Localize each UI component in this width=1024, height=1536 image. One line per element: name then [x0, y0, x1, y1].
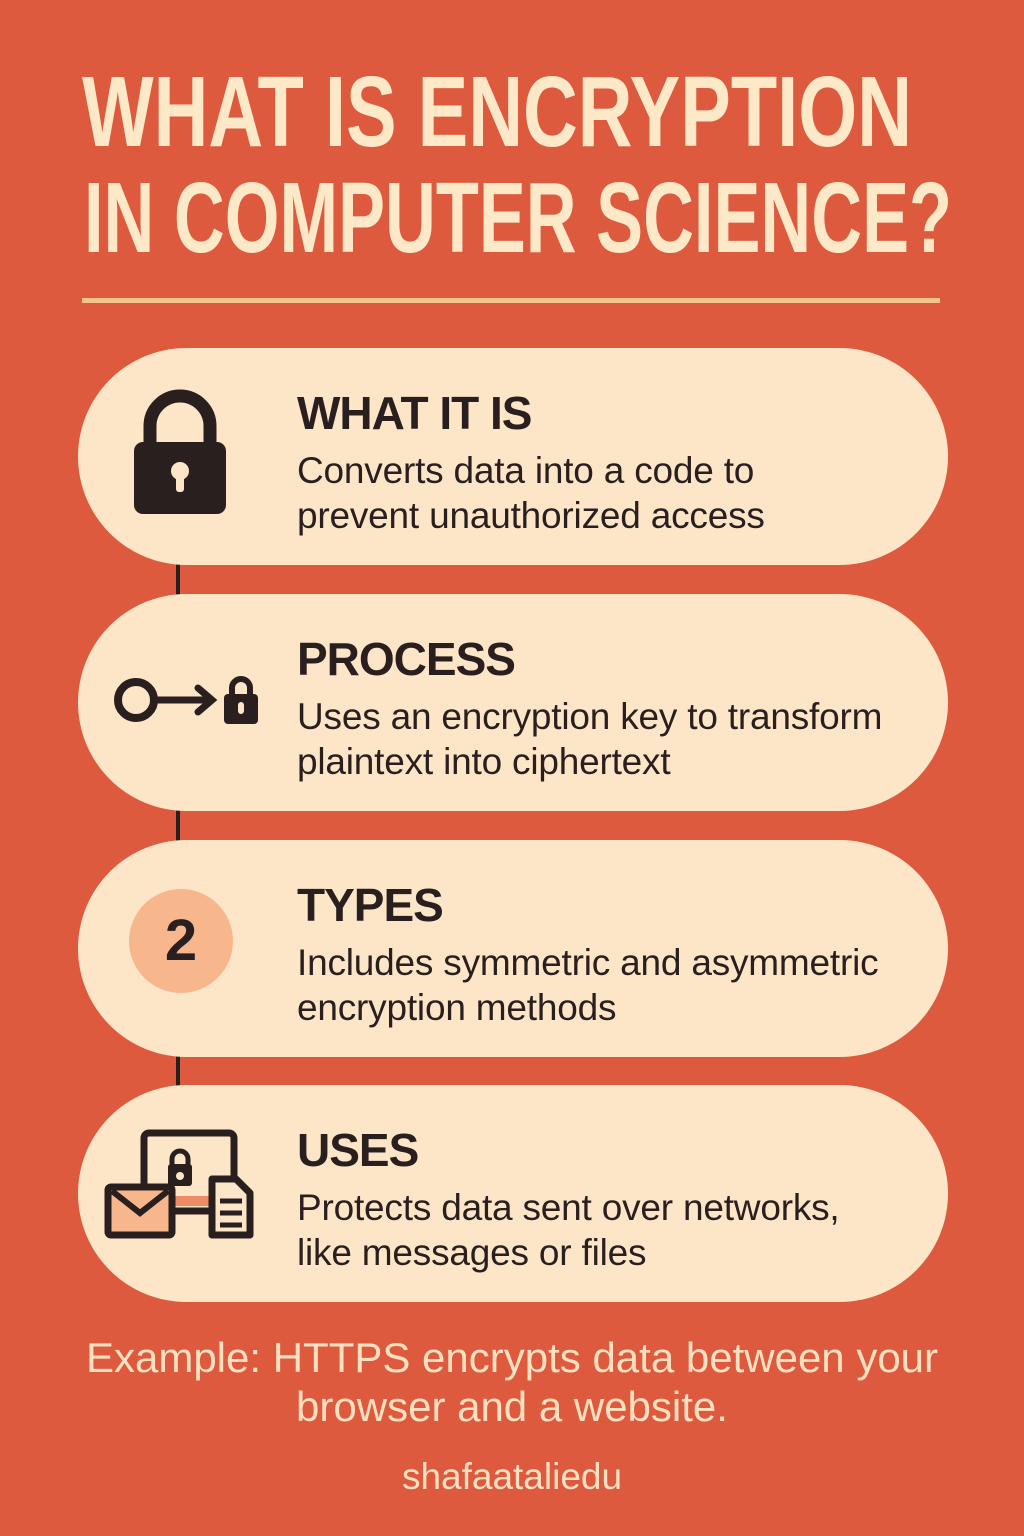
panel: types: TYPES — [297, 879, 443, 931]
panel: uses: like messages or files — [297, 1232, 646, 1273]
icon: devices — [104, 1130, 254, 1238]
panel: what it is: WHAT IT IS — [297, 387, 531, 439]
icon: padlock — [134, 390, 226, 514]
panel: what it is: Converts data into a code to — [297, 450, 754, 491]
panel: process: plaintext into ciphertext — [297, 741, 670, 782]
panel: uses: USES — [297, 1124, 418, 1176]
panel: types: Includes symmetric and asymmetric — [297, 942, 878, 983]
panel: uses — [78, 1085, 948, 1302]
title — [82, 56, 952, 270]
panel: what it is — [78, 348, 948, 565]
example text — [86, 1334, 938, 1430]
panel: process — [78, 594, 948, 811]
credit: shafaataliedu — [402, 1456, 622, 1497]
icon: number 2: 2 — [165, 908, 197, 973]
panel: types: encryption methods — [297, 987, 616, 1028]
icon: key to lock — [114, 676, 258, 724]
panel: process: PROCESS — [297, 633, 515, 685]
panel: what it is: prevent unauthorized access — [297, 495, 765, 536]
panel: process: Uses an encryption key to transform — [297, 696, 882, 737]
icon: number 2 — [129, 889, 233, 993]
panel: types — [78, 840, 948, 1057]
panel: uses: Protects data sent over networks, — [297, 1187, 840, 1228]
example text: browser and a website. — [296, 1383, 728, 1430]
example text: Example: HTTPS encrypts data between your — [86, 1334, 938, 1381]
